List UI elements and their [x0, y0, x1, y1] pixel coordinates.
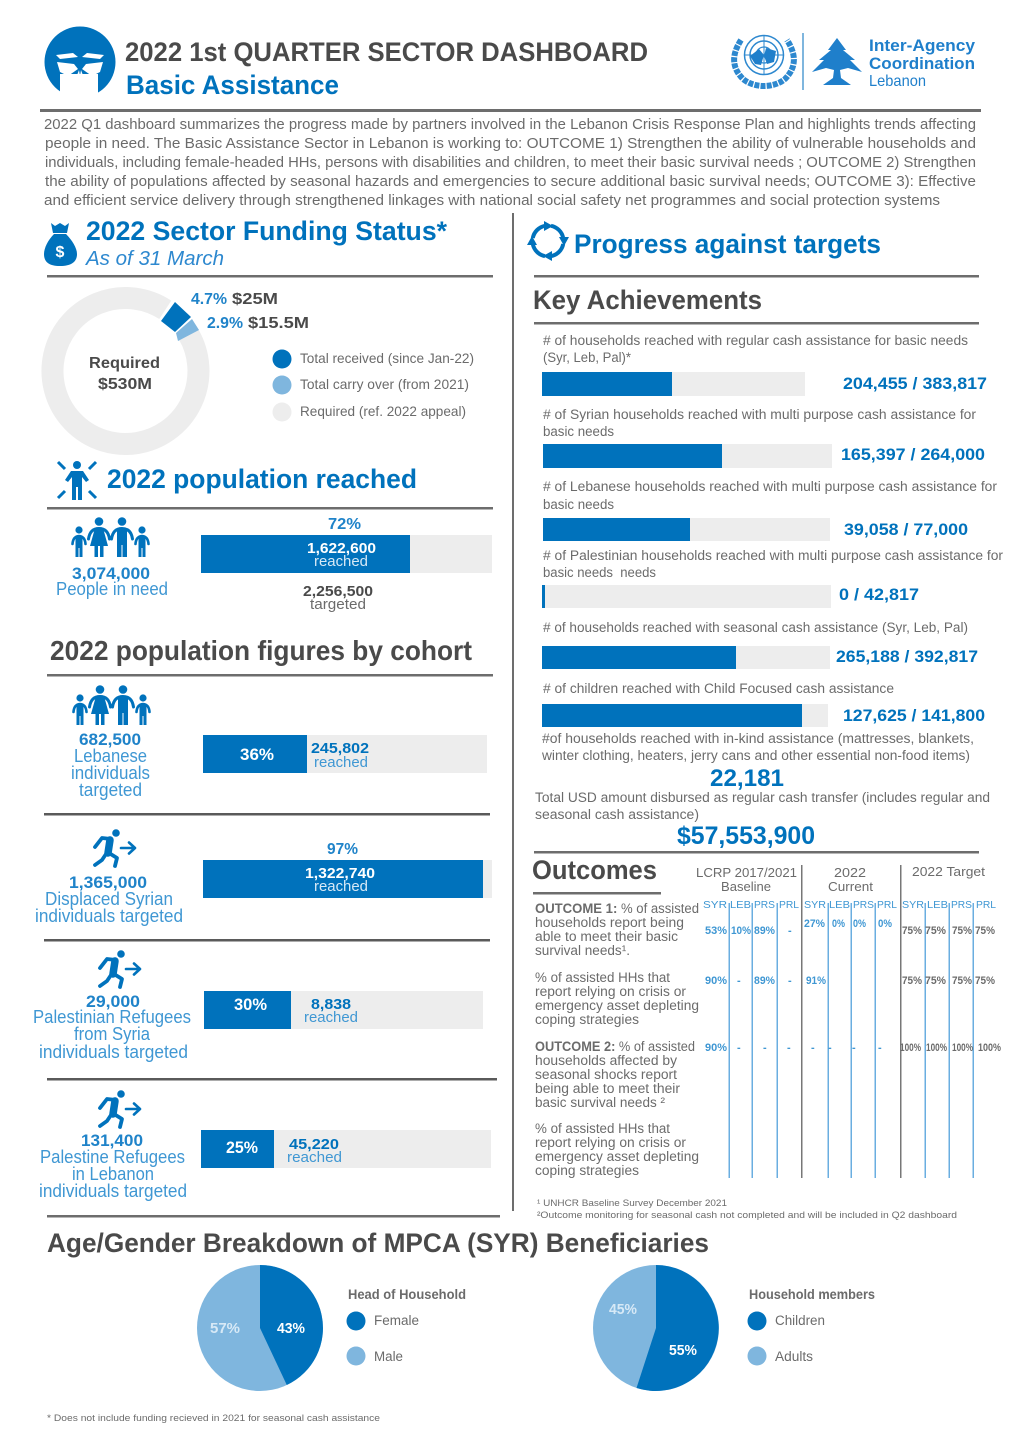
label: Displaced Syrian: individuals targeted	[35, 906, 183, 926]
pie chart: household members: 45%	[609, 1301, 637, 1318]
achievement: in-kind	[541, 731, 974, 792]
title	[125, 37, 648, 100]
legend: head of household: Male	[374, 1349, 403, 1364]
table column labels: SYR	[703, 899, 727, 911]
table values: target: 75%	[952, 925, 972, 937]
progress bar: population reached: reached	[314, 553, 368, 570]
outcome 2 description: being able to meet their	[535, 1081, 681, 1096]
achievement: Lebanese MPC: basic needs	[543, 497, 614, 512]
legend: head of household: Female	[374, 1313, 419, 1328]
legend: funding: Total received (since Jan-22)	[300, 350, 474, 366]
label: PRS: from Syria	[74, 1024, 151, 1044]
icon: runner	[100, 950, 140, 987]
progress bar: Displaced Syrian: 97%	[327, 841, 358, 858]
pie chart: household members	[593, 1265, 719, 1391]
achievement: Palestinian MPC	[542, 548, 1004, 608]
table values: baseline and current: -	[787, 1042, 791, 1054]
table values: baseline and current: 0%	[832, 918, 845, 930]
achievement: in-kind: #of households reached with in-kind assistance (mattresses, blankets,	[542, 731, 974, 746]
table values: baseline and current: 0%	[853, 918, 866, 930]
icon: person with rays	[58, 461, 96, 500]
label: Displaced Syrian: 1,365,000	[69, 874, 147, 892]
table header: LCRP 2017/2021	[696, 865, 797, 880]
logo: United Nations emblem	[734, 36, 794, 86]
legend: head of household	[346, 1287, 466, 1366]
funding labels: $25M	[232, 291, 278, 308]
achievement: regular cash	[542, 333, 987, 396]
outcome 2 coping description: report relying on crisis or	[535, 1135, 687, 1150]
achievement: Palestinian MPC: basic needs needs	[543, 565, 656, 580]
outcome 1 description: able to meet their basic	[535, 929, 678, 944]
label: Lebanese: individuals	[71, 763, 150, 783]
achievement: regular cash: # of households reached with regular cash assistance for basic needs	[543, 333, 968, 348]
cohort: Displaced Syrian	[35, 829, 492, 926]
achievement: regular cash: (Syr, Leb, Pal)*	[543, 350, 632, 365]
legend: head of household: Head of Household	[348, 1287, 466, 1302]
achievement: regular cash: 204,455 / 383,817	[843, 374, 987, 393]
table column labels: LEB	[927, 899, 948, 911]
label: PRS: individuals targeted	[39, 1042, 188, 1062]
icon: money bag	[44, 223, 77, 266]
table values: target	[900, 925, 1001, 1054]
label: PRL	[39, 1132, 187, 1201]
pie chart: head of household: 57%	[210, 1320, 240, 1337]
achievement: USD disbursed: seasonal cash assistance)	[535, 807, 699, 822]
heading: funding status: As of 31 March	[85, 248, 224, 270]
legend: household members: Children	[775, 1313, 825, 1328]
panel: figures by cohort	[33, 635, 497, 1201]
label: Displaced Syrian: Displaced Syrian	[45, 889, 173, 909]
icon: family	[74, 685, 150, 725]
heading: cohort: 2022 population figures by cohort	[50, 635, 472, 666]
intro paragraph: individuals, including female-headed HHs, persons with disabilities and children, to meet their basic survival needs ; OUTCOME 2) Strengthen	[45, 155, 976, 171]
table values: target: 75%	[925, 925, 946, 937]
table column labels	[703, 899, 996, 911]
intro paragraph: the ability of populations affected by seasonal hazards and emergencies to secure additional basic survival needs; OUTCOME 3): Effective	[45, 174, 976, 190]
logo text: Inter-Agency Coordination Lebanon	[869, 36, 976, 90]
table values: baseline and current: 91%	[806, 975, 826, 987]
achievement: child focused cash: # of children reached with Child Focused cash assistance	[543, 681, 894, 696]
legend: household members: Household members	[749, 1287, 875, 1302]
table column labels: PRL	[877, 899, 897, 911]
legend: funding: Required (ref. 2022 appeal)	[300, 403, 466, 419]
table values: target: 100%	[900, 1042, 921, 1054]
pie chart: head of household	[197, 1265, 323, 1391]
table values: baseline and current: 0%	[878, 918, 892, 930]
outcomes footnotes	[537, 1198, 957, 1221]
heading: population reached: 2022 population reached	[107, 464, 417, 494]
table values: baseline and current: -	[828, 1042, 832, 1054]
achievement: in-kind: winter clothing, heaters, jerry cans and other essential non-food items)	[541, 748, 970, 763]
intro paragraph: 2022 Q1 dashboard summarizes the progress made by partners involved in the Lebanon Crisis Response Plan and highlights trends affecting	[44, 117, 976, 133]
table column labels: LEB	[730, 899, 751, 911]
achievement: seasonal cash: 265,188 / 392,817	[836, 647, 978, 666]
heading: funding status: 2022 Sector Funding Status*	[86, 216, 447, 246]
people in need: 3,074,000	[72, 564, 150, 583]
table header	[696, 864, 985, 894]
achievement: child focused cash: 127,625 / 141,800	[843, 706, 985, 725]
heading: breakdown: Age/Gender Breakdown of MPCA (SYR) Beneficiaries	[47, 1228, 709, 1258]
achievement: Palestinian MPC: # of Palestinian households reached with multi purpose cash assistance for	[543, 548, 1004, 563]
achievement: Syrian MPC: 165,397 / 264,000	[841, 445, 985, 464]
achievement: USD disbursed	[535, 790, 990, 850]
header icon: open box in circle	[44, 26, 116, 100]
table values: baseline and current: 10%	[731, 925, 751, 937]
outcome 2 coping description: coping strategies	[535, 1163, 639, 1178]
outcome 2 description	[535, 1039, 695, 1110]
table values: baseline and current: 90%	[705, 1042, 727, 1054]
table values: baseline and current: -	[788, 925, 792, 937]
funding labels	[191, 291, 309, 332]
table column labels: PRS	[853, 899, 874, 911]
cohort: Lebanese	[71, 685, 487, 800]
table values: baseline and current: -	[737, 1042, 741, 1054]
progress bar: population reached: targeted	[310, 596, 366, 613]
logo: cedar tree	[812, 38, 862, 85]
label: PRL: Palestine Refugees	[40, 1147, 185, 1167]
heading: progress against targets: Progress against targets	[574, 229, 881, 259]
legend: funding	[272, 350, 474, 422]
table values: baseline and current: 89%	[754, 925, 775, 937]
funding labels: $15.5M	[248, 315, 309, 332]
table values: target: 100%	[926, 1042, 947, 1054]
table header: 2022	[834, 865, 866, 880]
outcome 1 coping description	[535, 970, 699, 1027]
progress bar: PRS	[204, 991, 483, 1029]
achievement: Lebanese MPC: # of Lebanese households reached with multi purpose cash assistance for	[543, 479, 998, 494]
table column labels: PRL	[779, 899, 799, 911]
progress bar: Displaced Syrian: 1,322,740	[305, 865, 375, 882]
achievement: seasonal cash: # of households reached with seasonal cash assistance (Syr, Leb, Pal)	[543, 620, 968, 635]
table values: baseline and current: -	[763, 1042, 767, 1054]
achievement: Syrian MPC: basic needs	[543, 424, 614, 439]
cohort: Palestine Refugees in Lebanon	[39, 1090, 491, 1201]
table values: baseline and current: -	[811, 1042, 815, 1054]
table values: baseline and current: 89%	[754, 975, 775, 987]
cohort: Palestinian Refugees from Syria	[33, 950, 483, 1062]
outcome 1 description: households report being	[535, 915, 684, 930]
achievement: in-kind: 22,181	[710, 765, 784, 792]
progress bar: Lebanese: 36%	[240, 745, 274, 764]
table values: baseline and current	[705, 918, 892, 1054]
table column labels: LEB	[829, 899, 850, 911]
outcome 2 description: basic survival needs ²	[535, 1095, 665, 1110]
label: PRL: in Lebanon	[72, 1164, 154, 1184]
progress bar: PRL: 25%	[226, 1138, 258, 1157]
logo text: Inter-Agency Coordination Lebanon: Inter-Agency	[869, 36, 976, 55]
donut chart: funding: Required	[89, 355, 160, 372]
table values: target: 75%	[925, 975, 946, 987]
label: Lebanese: targeted	[79, 780, 142, 800]
table header: 2022 Target	[912, 864, 985, 879]
label: PRS	[33, 993, 191, 1062]
label: Lebanese	[71, 731, 150, 800]
outcome 1 coping description: coping strategies	[535, 1012, 639, 1027]
heading: outcomes: Outcomes	[532, 855, 657, 885]
outcomes footnotes: ¹ UNHCR Baseline Survey December 2021	[537, 1198, 727, 1209]
outcome 2 coping description: % of assisted HHs that	[535, 1121, 670, 1136]
table values: baseline and current: 27%	[804, 918, 825, 930]
outcome 1 coping description: emergency asset depleting	[535, 998, 699, 1013]
table values: target: 75%	[952, 975, 972, 987]
table header: Current	[828, 879, 873, 894]
progress bar: population reached	[201, 516, 492, 613]
progress bar: population reached: 72%	[328, 516, 361, 533]
outcome 2 description: seasonal shocks report	[535, 1067, 677, 1082]
heading: key achievements: Key Achievements	[533, 285, 762, 315]
table values: target: 100%	[978, 1042, 1001, 1054]
table values: baseline and current: -	[737, 975, 741, 987]
label: Lebanese: Lebanese	[74, 746, 147, 766]
icon: runner	[100, 1090, 140, 1127]
pie chart: head of household: 43%	[277, 1320, 305, 1337]
table column labels: PRL	[976, 899, 996, 911]
label: PRS: Palestinian Refugees	[33, 1007, 191, 1027]
progress bar: PRL: 45,220	[289, 1136, 339, 1153]
achievement: Lebanese MPC	[543, 479, 998, 541]
table column labels: SYR	[804, 899, 826, 911]
achievement: seasonal cash	[542, 620, 978, 669]
donut chart: funding	[52, 298, 199, 444]
funding labels: 2.9%	[207, 315, 243, 332]
table values: baseline and current: 53%	[705, 925, 727, 937]
progress bar: population reached: 2,256,500	[303, 583, 373, 600]
table values: baseline and current: 90%	[705, 975, 727, 987]
people in need: People in need	[56, 579, 168, 599]
progress bar: Displaced Syrian	[203, 841, 492, 898]
logo text: Inter-Agency Coordination Lebanon: Coordination	[869, 54, 975, 73]
label: Lebanese: 682,500	[79, 731, 141, 749]
intro paragraph	[44, 117, 976, 209]
achievement: Palestinian MPC: 0 / 42,817	[839, 585, 919, 604]
achievement: child focused cash	[542, 681, 985, 727]
outcome 2 description: OUTCOME 2: % of assisted	[535, 1039, 695, 1054]
logo divider	[802, 33, 804, 90]
outcome 2 coping description: emergency asset depleting	[535, 1149, 699, 1164]
icon: money bag: $	[56, 244, 65, 261]
table column labels: PRS	[951, 899, 972, 911]
table column labels: SYR	[902, 899, 924, 911]
progress bar: Displaced Syrian: reached	[314, 878, 368, 895]
people in need	[56, 564, 168, 599]
outcome 1 description: OUTCOME 1: % of assisted	[535, 901, 699, 916]
intro paragraph: and efficient service delivery through strengthened linkages with national social safety net programmes and social protection systems	[44, 193, 940, 209]
intro paragraph: people in need. The Basic Assistance Sector in Lebanon is working to: OUTCOME 1) Strengthen the ability of vulnerable households and	[45, 136, 976, 152]
donut chart: funding: $530M	[98, 376, 152, 393]
label: PRL: individuals targeted	[39, 1181, 187, 1201]
legend: household members	[748, 1287, 875, 1366]
progress bar: PRS: 8,838	[311, 996, 351, 1013]
progress bar: Lebanese: 245,802	[311, 740, 369, 757]
progress bar: PRL	[201, 1130, 491, 1168]
outcome 2 coping description	[535, 1121, 699, 1178]
panel: age/gender breakdown	[47, 1228, 875, 1424]
achievement: Syrian MPC	[543, 407, 985, 468]
panel: progress against targets	[527, 221, 1004, 854]
logo text: Inter-Agency Coordination Lebanon: Lebanon	[869, 73, 926, 90]
footnote: * Does not include funding recieved in 2021 for seasonal cash assistance	[47, 1413, 380, 1424]
outcome 1 coping description: % of assisted HHs that	[535, 970, 670, 985]
outcome 1 description	[535, 901, 699, 958]
outcome 1 coping description: report relying on crisis or	[535, 984, 687, 999]
outcome 2 description: households affected by	[535, 1053, 677, 1068]
table values: target: 75%	[975, 975, 995, 987]
progress bar: PRS: 30%	[234, 995, 267, 1014]
outcomes footnotes: ²Outcome monitoring for seasonal cash not completed and will be included in Q2 dashboard	[537, 1210, 957, 1221]
table values: target: 75%	[975, 925, 995, 937]
progress bar: PRS: reached	[304, 1009, 358, 1026]
table column lines	[728, 865, 974, 1178]
icon: circular arrows	[527, 221, 569, 261]
table column labels: PRS	[754, 899, 775, 911]
table values: baseline and current: -	[852, 1042, 856, 1054]
table values: baseline and current: -	[878, 1042, 882, 1054]
achievement: Syrian MPC: # of Syrian households reached with multi purpose cash assistance for	[543, 407, 977, 422]
label: Displaced Syrian	[35, 874, 183, 926]
outcome 1 description: survival needs¹.	[535, 943, 630, 958]
achievement: Lebanese MPC: 39,058 / 77,000	[844, 520, 968, 539]
table header: Baseline	[721, 879, 771, 894]
table values: target: 100%	[952, 1042, 973, 1054]
icon: runner	[95, 829, 135, 866]
heading: funding status	[85, 216, 447, 270]
achievement: USD disbursed: Total USD amount disbursed as regular cash transfer (includes regular and	[535, 790, 990, 805]
table values: target: 75%	[902, 975, 922, 987]
achievement: USD disbursed: $57,553,900	[677, 822, 815, 850]
label: PRL: 131,400	[81, 1132, 143, 1150]
legend: household members: Adults	[775, 1349, 813, 1364]
progress bar: Lebanese: reached	[314, 754, 368, 771]
progress bar: PRL: reached	[287, 1149, 342, 1166]
icon: family	[72, 517, 148, 557]
title: 2022 1st QUARTER SECTOR DASHBOARD	[125, 37, 648, 67]
progress bar: population reached: 1,622,600	[307, 540, 376, 557]
table values: baseline and current: -	[788, 975, 792, 987]
panel: population reached	[47, 461, 493, 613]
table values: target: 75%	[902, 925, 922, 937]
funding labels: 4.7%	[191, 291, 227, 308]
title: Basic Assistance	[126, 70, 339, 100]
legend: funding: Total carry over (from 2021)	[300, 376, 469, 392]
label: PRS: 29,000	[86, 993, 140, 1011]
panel: outcomes	[532, 855, 1001, 1221]
panel: funding status	[44, 216, 493, 444]
progress bar: Lebanese	[203, 735, 487, 773]
pie chart: household members: 55%	[669, 1342, 697, 1359]
